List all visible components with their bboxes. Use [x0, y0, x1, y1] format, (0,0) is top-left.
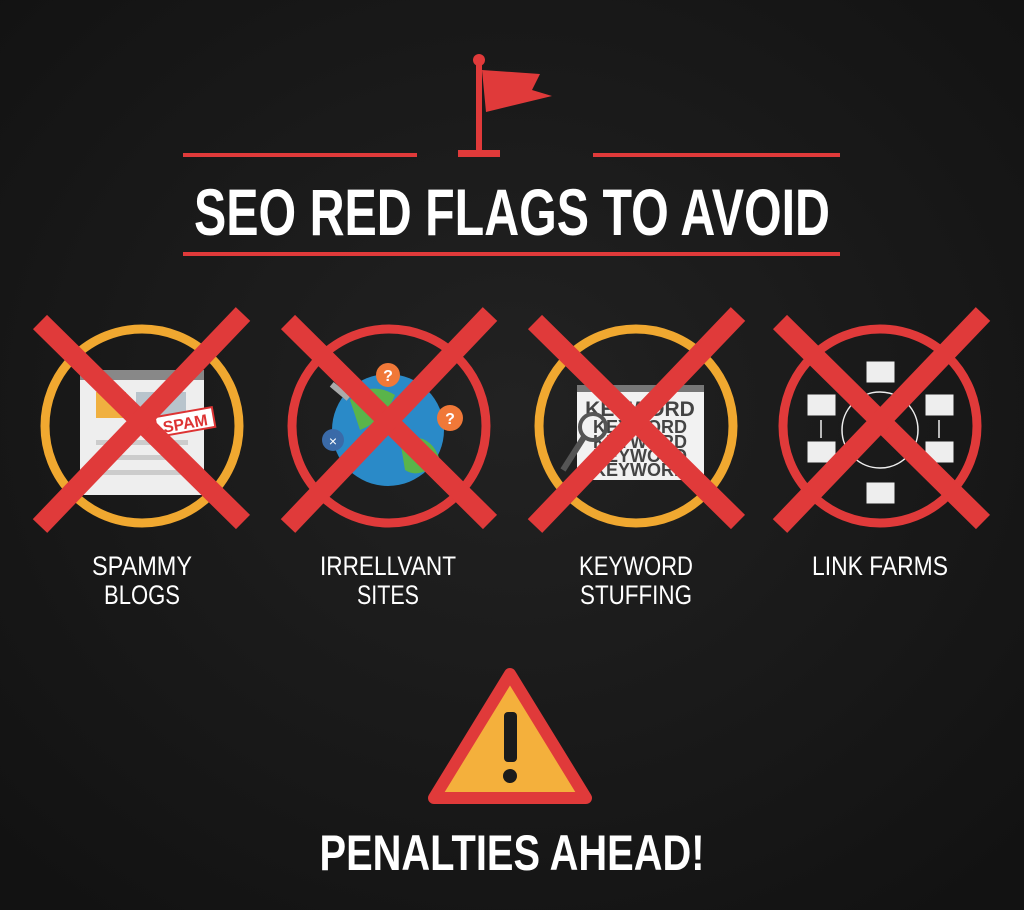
icon: spam page: SPAM	[162, 412, 209, 437]
icon: warning triangle	[434, 674, 586, 798]
icon: keyword page: KEYWORD	[593, 460, 687, 480]
panel: keyword stuffing	[535, 314, 738, 610]
icon: cross-out	[535, 314, 738, 526]
panel: link farms	[780, 314, 983, 581]
panel: irrelevant sites: SITES	[357, 580, 419, 610]
label: LINK FARMS	[812, 551, 948, 581]
icon: globe	[322, 363, 463, 486]
label: SPAMMY	[92, 551, 192, 581]
icon: red flag	[458, 54, 552, 157]
icon: cross-out	[40, 314, 243, 526]
icon: globe: ?	[445, 411, 455, 428]
icon: globe: ×	[329, 433, 337, 449]
label: IRRELLVANT	[320, 551, 456, 581]
icon: globe: ?	[383, 368, 393, 385]
icon: keyword page: KEYWORD	[593, 432, 687, 452]
panel: irrelevant sites	[288, 314, 490, 610]
icon: keyword page: KEYWORD	[585, 398, 695, 421]
icon: cross-out	[780, 314, 983, 526]
icon: keyword page	[563, 385, 704, 480]
icon: network	[808, 362, 953, 503]
footer text: PENALTIES AHEAD!	[320, 825, 704, 881]
icon: cross-out	[288, 314, 490, 526]
icon: keyword page: KEYWORD	[593, 417, 687, 437]
icon: keyword page: KEYWORD	[593, 446, 687, 466]
icon: spam page	[80, 370, 215, 495]
panel: spammy blogs	[40, 314, 243, 610]
label: KEYWORD	[579, 551, 693, 581]
panel: spammy blogs: BLOGS	[104, 580, 180, 610]
title	[183, 153, 840, 256]
panel: keyword stuffing: STUFFING	[580, 580, 692, 610]
